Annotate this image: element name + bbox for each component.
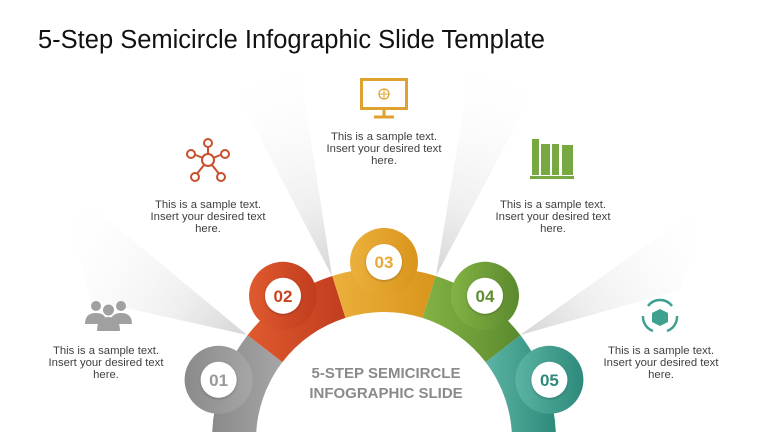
text 04: here. [540,223,566,235]
text 04: Insert your desired text [496,211,610,223]
text 04: This is a sample text. [500,199,606,211]
segment 03 [332,228,436,318]
center label: 5-STEP SEMICIRCLE [312,365,460,382]
icon: network [187,139,229,181]
icon: people [85,301,132,331]
center label: INFOGRAPHIC SLIDE [309,385,463,402]
text 02: here. [195,223,221,235]
icon: books [530,139,574,179]
text 05: Insert your desired text [604,357,718,369]
text 03: here. [371,155,397,167]
segment 04: 04 [476,287,495,306]
icon: monitor [362,80,406,117]
segment 03: 03 [375,253,393,272]
text 05: This is a sample text. [608,345,714,357]
segment 04 [422,262,520,362]
text 04 [496,199,610,235]
text 03: Insert your desired text [327,143,441,155]
text 03: This is a sample text. [331,131,437,143]
segment 01 [185,335,282,432]
rays [60,70,710,335]
title: 5-Step Semicircle Infographic Slide Template [38,26,545,54]
segment 02: 02 [274,287,292,306]
text 02: Insert your desired text [151,211,265,223]
text 05 [604,345,718,381]
text 01: This is a sample text. [53,345,159,357]
text 01: here. [93,369,119,381]
text 01 [49,345,164,381]
segment 01: 01 [209,371,228,390]
text 05: here. [648,369,674,381]
icon: recycle box [643,300,677,331]
text 03 [327,131,442,167]
text 01: Insert your desired text [49,357,163,369]
text 02 [151,199,266,235]
segment 05 [486,335,583,432]
segment 05: 05 [540,371,559,390]
center label [309,365,463,402]
segment 02 [248,262,346,362]
text 02: This is a sample text. [155,199,261,211]
